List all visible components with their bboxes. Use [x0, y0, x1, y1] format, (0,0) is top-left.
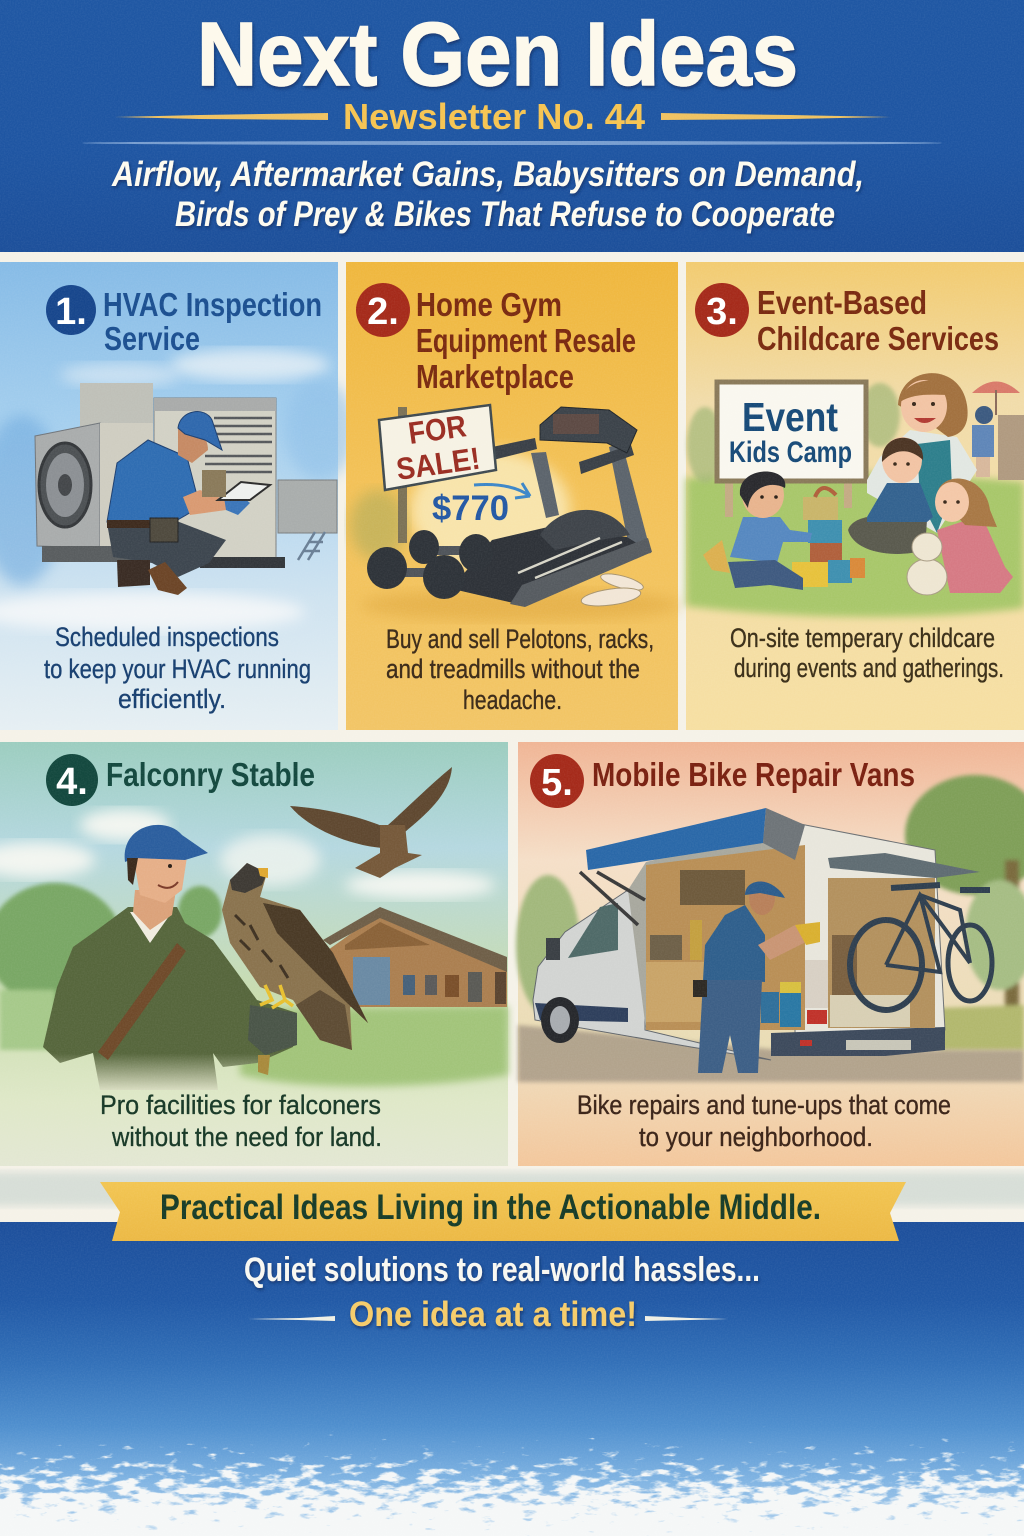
number badge 4: 4.: [56, 761, 88, 803]
number badge 3: [695, 283, 749, 337]
heading 1: HVAC Inspection: [103, 286, 322, 323]
number badge 5: [530, 754, 584, 808]
sign: for sale: SALE!: [394, 441, 482, 487]
HVAC units: [35, 383, 337, 568]
illustration: children playing at event camp: [703, 373, 1024, 595]
tagline: Birds of Prey & Bikes That Refuse to Cooperate: [175, 195, 835, 234]
description 5: to your neighborhood.: [639, 1122, 873, 1152]
header band: [0, 0, 1024, 252]
panel 1: HVAC inspection service: [0, 262, 355, 730]
trees: [516, 775, 1024, 1050]
heading 4: Falconry Stable: [106, 756, 315, 793]
panel 4: falconry stable: [0, 742, 508, 1166]
seated boy in light blue: [703, 472, 812, 590]
illustration: wooden stable building: [323, 907, 507, 1007]
title: Next Gen Ideas: [197, 5, 798, 105]
description 4: [100, 1090, 382, 1152]
description 5: [577, 1090, 951, 1152]
heading 3: Event-Based: [757, 284, 927, 321]
heading 2: Equipment Resale: [416, 322, 636, 359]
mechanic: [693, 881, 820, 1073]
mottled strip beside ribbon: [0, 1172, 1024, 1206]
sign: event kids camp: Kids Camp: [729, 436, 852, 469]
panel 5: mobile bike repair vans: [516, 742, 1024, 1166]
number badge 5: 5.: [541, 762, 573, 804]
description 1: Scheduled inspections: [55, 622, 279, 652]
background people and parasol: [972, 382, 1024, 480]
awning: [580, 808, 980, 925]
adult carer: [867, 373, 977, 533]
description 2: [386, 624, 654, 715]
number badge 1: 1.: [55, 291, 87, 333]
seated girl in pink: [935, 478, 1013, 593]
bicycle: [850, 885, 992, 1010]
ribbon text: Practical Ideas Living in the Actionable Middle.: [160, 1188, 821, 1227]
description 1: efficiently.: [118, 684, 226, 714]
sign: event kids camp: Event: [742, 394, 838, 440]
tagline: [111, 155, 864, 234]
heading 1: Service: [104, 320, 200, 357]
technician: [107, 412, 270, 595]
number badge 2: [356, 283, 410, 337]
subtitle: newsletter number: [115, 96, 890, 137]
heading 2: Marketplace: [416, 358, 574, 395]
sign: event kids camp: [717, 382, 866, 517]
closing text: One idea at a time!: [349, 1295, 637, 1334]
heading 5: Mobile Bike Repair Vans: [592, 756, 915, 793]
number badge 3: 3.: [706, 291, 738, 333]
bottom band: [0, 1222, 1024, 1536]
dumbbells: [367, 530, 493, 599]
number badge 4: [46, 754, 98, 806]
panel 2: home gym equipment resale marketplace: [346, 262, 680, 730]
heading 2: Home Gym: [416, 286, 562, 323]
closing text: Quiet solutions to real-world hassles...: [244, 1251, 760, 1289]
illustration: falconer: [43, 825, 297, 1090]
heading 2: [416, 286, 636, 395]
illustration: treadmill with for-sale sign: [367, 405, 652, 609]
shoes: [580, 571, 645, 609]
price with arrow: $770: [432, 489, 509, 528]
van body: [533, 823, 945, 1060]
illustration: falcon in flight: [290, 767, 452, 878]
ribbon banner: [100, 1182, 906, 1241]
interior workshop: [646, 845, 935, 1030]
heading 1: [103, 286, 322, 357]
description 5: Bike repairs and tune-ups that come: [577, 1090, 951, 1120]
description 2: headache.: [463, 685, 562, 715]
seated boy in blue sweater: [848, 437, 933, 554]
trees: [0, 883, 222, 1050]
description 1: [44, 622, 311, 714]
sign: for sale: FOR: [406, 408, 468, 451]
number badge 2: 2.: [367, 291, 399, 333]
number badge 1: [46, 285, 96, 335]
description 2: Buy and sell Pelotons, racks,: [386, 624, 654, 654]
price with arrow: [432, 483, 530, 528]
closing text: [244, 1251, 760, 1334]
description 1: to keep your HVAC running: [44, 654, 311, 684]
treadmill: [457, 407, 652, 607]
description 2: and treadmills without the: [386, 654, 640, 684]
tagline: Airflow, Aftermarket Gains, Babysitters on Demand,: [111, 155, 864, 194]
subtitle: newsletter number: Newsletter No. 44: [343, 96, 645, 137]
illustration: technician inspecting HVAC unit: [35, 383, 337, 595]
panel 3: event-based childcare services: [686, 262, 1024, 730]
grass: [240, 1006, 508, 1086]
heading 3: [757, 284, 999, 357]
description 3: [730, 623, 1004, 683]
teddy bear: [907, 533, 947, 595]
illustration: perched falcon: [222, 863, 368, 1050]
blocks: [792, 488, 865, 587]
road: [518, 1025, 1024, 1082]
illustration: repair van: [533, 808, 992, 1073]
description 4: without the need for land.: [111, 1122, 382, 1152]
description 4: Pro facilities for falconers: [100, 1090, 381, 1120]
sign: for sale: [379, 405, 496, 543]
